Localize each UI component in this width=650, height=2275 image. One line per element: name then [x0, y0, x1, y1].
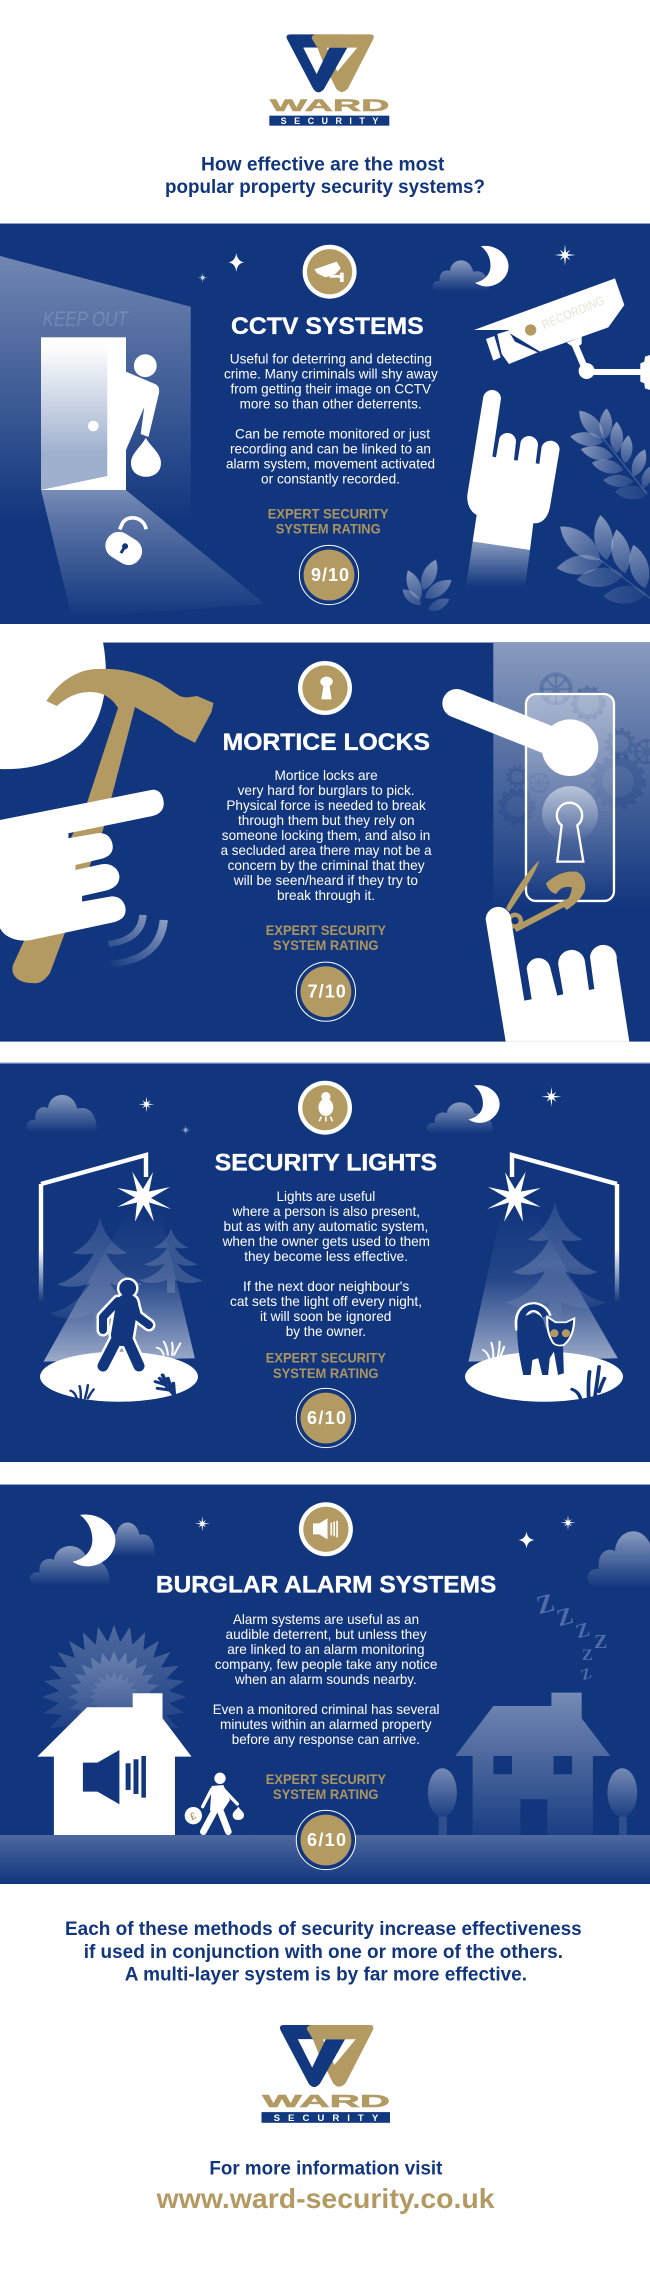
icon: keyhole badge [298, 661, 352, 715]
zzz [533, 1588, 607, 1684]
rating label: EXPERT SECURITY [266, 1771, 387, 1787]
stars [198, 244, 575, 283]
moon and clouds left [30, 1514, 155, 1585]
body text [222, 1188, 430, 1339]
body text [221, 767, 432, 903]
zzz: Z [579, 1666, 594, 1684]
house with alarm speaker [37, 1693, 192, 1835]
body text: Alarm systems are useful as an [233, 1611, 419, 1627]
panel: burglar alarm systems [0, 1484, 650, 1884]
body text: break through it. [277, 887, 375, 903]
body text: If the next door neighbour's [243, 1278, 409, 1294]
body text: Physical force is needed to break [226, 797, 427, 813]
rating label: SYSTEM RATING [273, 937, 379, 953]
icon: cctv badge [303, 245, 357, 299]
icon: door lock plate and handle [457, 694, 614, 901]
icon: speaker badge [299, 1502, 353, 1556]
icon: walking person [103, 1279, 149, 1366]
body text: someone locking them, and also in [222, 827, 430, 843]
white blob top left [0, 642, 106, 769]
body text: they become less effective. [244, 1248, 408, 1264]
body text: it will soon be ignored [260, 1308, 391, 1324]
body text: from getting their image on CCTV [230, 380, 432, 396]
icon: open padlock [100, 509, 158, 570]
leaves lower right [553, 514, 650, 605]
heading: CCTV SYSTEMS [231, 313, 424, 340]
rating badge 9/10 [299, 545, 359, 605]
body text [213, 1611, 440, 1747]
keep out sign: KEEP OUT [43, 308, 129, 331]
light wall behind door [0, 256, 191, 520]
rating label: EXPERT SECURITY [266, 1350, 387, 1366]
zzz: Z [573, 1619, 592, 1643]
icon: hammer [12, 669, 213, 983]
body text: where a person is also present, [232, 1203, 420, 1219]
body text: when the owner gets used to them [222, 1233, 430, 1249]
title [165, 154, 485, 198]
body text: through them but they rely on [238, 812, 415, 828]
grass and leaf details [70, 1342, 604, 1398]
logo: Ward Security top: WARD [270, 96, 389, 115]
logo: Ward Security bottom: WARD [262, 2091, 390, 2111]
body text: very hard for burglars to pick. [238, 782, 415, 798]
body text: Even a monitored criminal has several [213, 1701, 440, 1717]
closing statement: if used in conjunction with one or more of the others. [84, 1941, 563, 1963]
body text: or constantly recorded. [261, 470, 400, 486]
open door [41, 337, 126, 490]
pine trees left [50, 1217, 203, 1337]
pine tree right [505, 1202, 605, 1327]
rating label [266, 922, 387, 953]
rating label: EXPERT SECURITY [266, 922, 387, 938]
rating label: EXPERT SECURITY [268, 505, 389, 521]
title: popular property security systems? [165, 176, 485, 198]
burglar leaving with bag [126, 354, 161, 477]
website address: www.ward-security.co.uk [156, 2183, 495, 2214]
body text: crime. Many criminals will shy away [224, 365, 438, 381]
body text: are linked to an alarm monitoring [227, 1641, 424, 1657]
light cones [44, 1210, 618, 1362]
rating label [266, 1350, 387, 1381]
body text: alarm system, movement activated [226, 455, 435, 471]
zzz: Z [594, 1631, 607, 1653]
right lamp frame and light [487, 1155, 619, 1302]
heading: BURGLAR ALARM SYSTEMS [156, 1572, 496, 1599]
body text: a secluded area there may not be a [221, 842, 432, 858]
moon and cloud [433, 246, 508, 291]
logo: Ward Security top [269, 34, 389, 126]
night sky right: cloud, moon and star [427, 1085, 561, 1133]
rating label [268, 505, 389, 537]
zzz: Z [554, 1603, 576, 1632]
icon: light bulb badge [298, 1081, 352, 1135]
icon: cat [517, 1307, 574, 1375]
logo: Ward Security top: SECURITY [281, 116, 378, 126]
body text: minutes within an alarmed property [220, 1716, 432, 1732]
rating label: SYSTEM RATING [273, 1786, 379, 1802]
rating badge 6/10 [296, 1388, 356, 1448]
body text: company, few people take any notice [215, 1656, 438, 1672]
rating label: SYSTEM RATING [276, 521, 381, 537]
icon: burglar with bags: £ [188, 1811, 199, 1823]
panel: CCTV systems [0, 223, 650, 624]
cloud right [588, 1531, 650, 1587]
icon: security camera: RECORDING [540, 293, 607, 332]
sleeping neighbour house and trees [428, 1693, 637, 1835]
heading: MORTICE LOCKS [223, 729, 430, 756]
icon: hand gripping hammer [0, 790, 164, 964]
panel: security lights [0, 1063, 650, 1462]
body text: Lights are useful [276, 1188, 375, 1204]
rating badge 9/10: 9/10 [311, 565, 349, 585]
zzz: Z [533, 1588, 557, 1620]
icon: security camera [474, 278, 650, 390]
body text: but as with any automatic system, [224, 1218, 428, 1234]
icon: burglar with bags [185, 1773, 244, 1832]
icon: pointing hand [466, 390, 560, 587]
light on floor [41, 490, 265, 618]
title: How effective are the most [201, 154, 445, 176]
rating badge 6/10 [296, 1810, 356, 1870]
stars [195, 1515, 576, 1548]
ground strip [0, 1835, 650, 1884]
body text: will be seen/heard if they try to [233, 872, 418, 888]
body text: concern by the criminal that they [228, 857, 425, 873]
heading: SECURITY LIGHTS [215, 1150, 437, 1177]
body text: Can be remote monitored or just [235, 425, 430, 441]
leaves upper right [569, 406, 650, 500]
body text: Useful for deterring and detecting [230, 350, 432, 366]
alarm sound burst [42, 1625, 186, 1728]
closing statement: A multi-layer system is by far more effective. [125, 1964, 527, 1986]
logo: Ward Security bottom: SECURITY [274, 2113, 379, 2124]
rating badge 7/10: 7/10 [308, 982, 346, 1002]
closing statement: Each of these methods of security increase effectiveness [65, 1918, 582, 1940]
rating badge 6/10: 6/10 [307, 1408, 346, 1428]
rating label [266, 1771, 387, 1802]
closing statement [65, 1918, 582, 1986]
logo: Ward Security bottom [261, 2025, 390, 2124]
night sky left: cloud and stars [27, 1095, 191, 1135]
body text: by the owner. [286, 1323, 366, 1339]
body text: before any response can arrive. [232, 1731, 420, 1747]
body text: when an alarm sounds nearby. [234, 1671, 417, 1687]
rating badge 7/10 [296, 962, 356, 1021]
left lamp frame and light [39, 1155, 171, 1302]
icon: safety pin [506, 860, 585, 929]
gears [499, 674, 650, 824]
panel: mortice locks [0, 642, 650, 1042]
body text: Mortice locks are [274, 767, 378, 783]
door panel [493, 643, 650, 908]
body text: more so than other deterrents. [240, 395, 422, 411]
rating badge 6/10: 6/10 [307, 1830, 346, 1850]
zzz: Z [582, 1647, 593, 1664]
body text: cat sets the light off every night, [230, 1293, 422, 1309]
rating label: SYSTEM RATING [273, 1365, 379, 1381]
body text [224, 350, 438, 486]
icon: hand picking lock [486, 907, 629, 1042]
body text: recording and can be linked to an [230, 440, 431, 456]
leaves lower centre [399, 557, 455, 614]
more information line: For more information visit [209, 2158, 443, 2180]
body text: audible deterrent, but unless they [226, 1626, 427, 1642]
ground pools of light [40, 1352, 623, 1402]
